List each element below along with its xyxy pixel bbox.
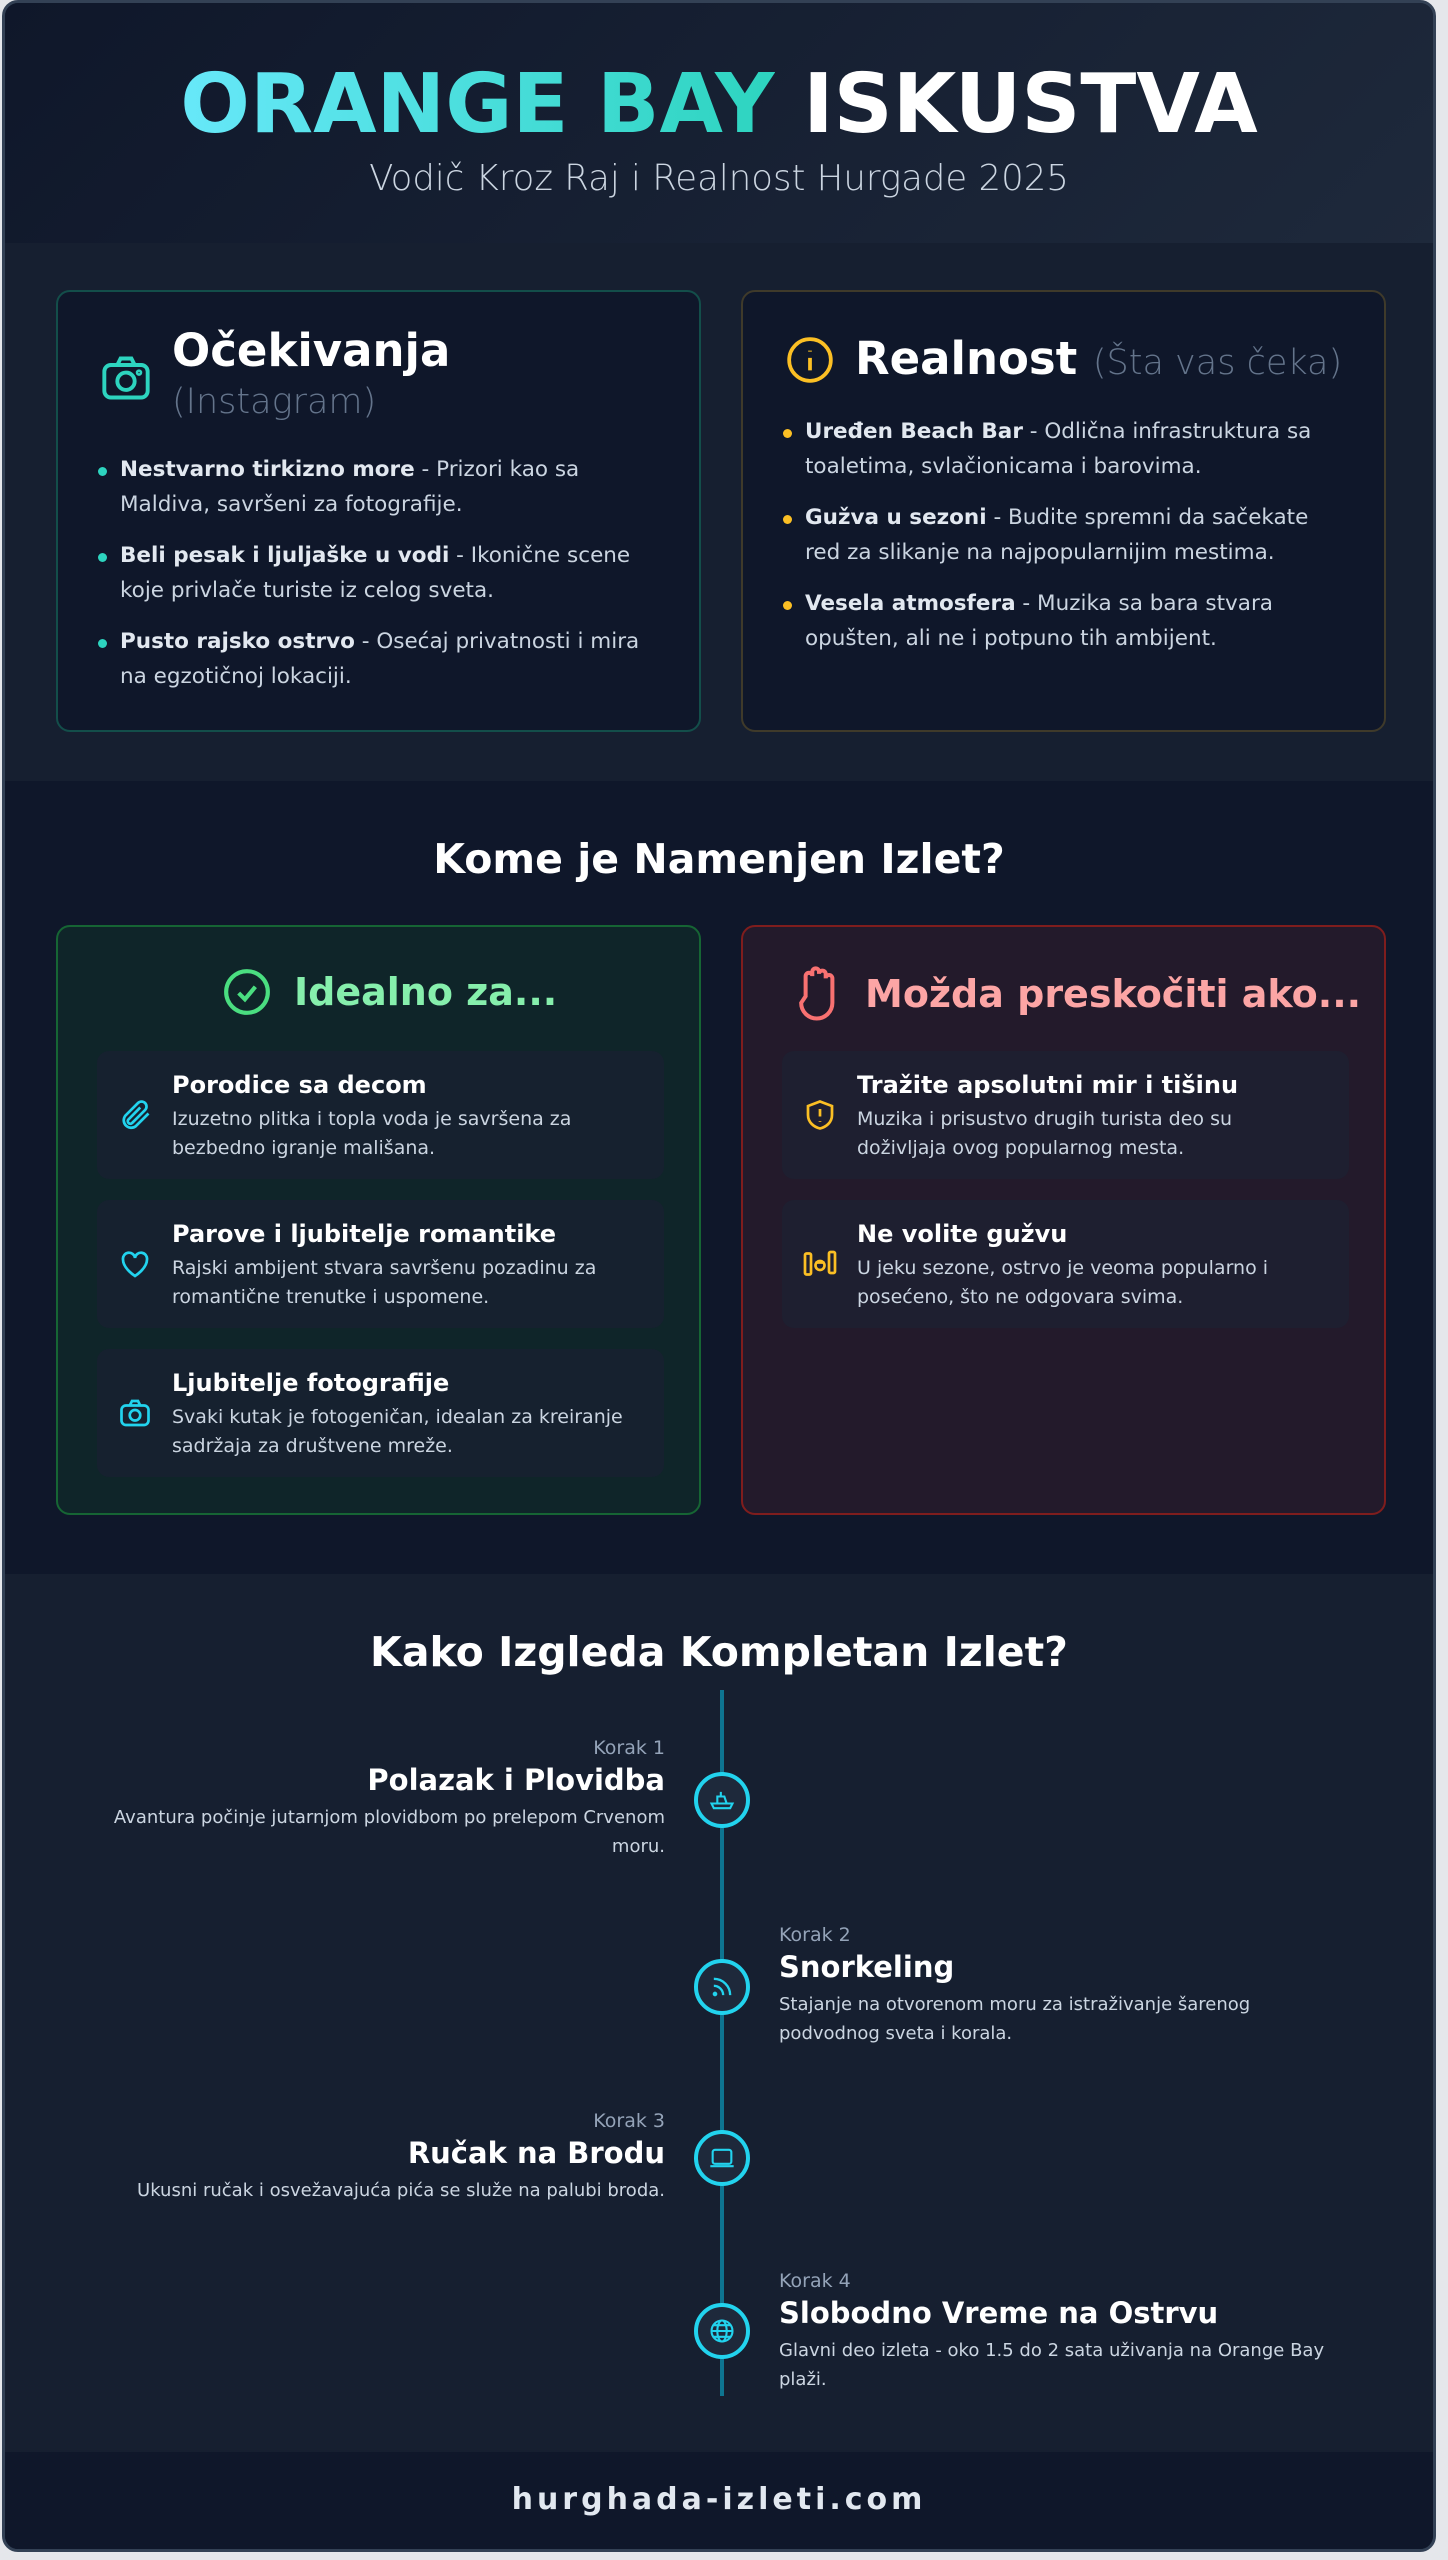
step 4: Korak 4	[779, 2270, 851, 2292]
step 3	[137, 2110, 665, 2201]
icon: camera	[102, 356, 150, 400]
item: families: Porodice sa decom	[172, 1071, 427, 1099]
icon: info	[787, 337, 833, 383]
step 1: Korak 1	[593, 1737, 665, 1759]
item: quiet: Muzika i prisustvo drugih turista deo su doživljaja ovog popularnog mesta.	[857, 1108, 1232, 1159]
panel: expectations: (Instagram)	[172, 382, 376, 422]
icon: globe	[694, 2303, 750, 2359]
item: families: Izuzetno plitka i topla voda je savršena za bezbedno igranje mališana.	[172, 1108, 571, 1159]
heading: Očekivanja	[172, 324, 450, 377]
step 1: Polazak i Plovidba	[367, 1763, 665, 1797]
bullets	[783, 429, 792, 438]
bullets	[98, 467, 107, 476]
step 1: Avantura počinje jutarnjom plovidbom po prelepom Crvenom moru.	[114, 1807, 665, 1857]
item: quiet	[782, 1051, 1349, 1179]
step 3: Ručak na Brodu	[408, 2136, 665, 2170]
icon: lunch	[694, 2130, 750, 2186]
step 2: Korak 2	[779, 1924, 851, 1946]
step 2: Stajanje na otvorenom moru za istraživanje šarenog podvodnog sveta i korala.	[779, 1994, 1250, 2044]
panel: expectations: Beli pesak i ljuljaške u vodi - Ikonične scene koje privlače turiste iz celog sveta.	[120, 543, 630, 603]
header	[5, 3, 1439, 243]
heading: Kako Izgleda Kompletan Izlet?	[370, 1628, 1068, 1676]
item: couples: Parove i ljubitelje romantike	[172, 1220, 556, 1248]
step 4: Slobodno Vreme na Ostrvu	[779, 2296, 1218, 2330]
step 4: Glavni deo izleta - oko 1.5 do 2 sata uživanja na Orange Bay plaži.	[779, 2340, 1324, 2390]
section: who is it for	[5, 781, 1439, 1574]
step 3: Ukusni ručak i osvežavajuća pića se služe na palubi broda.	[137, 2180, 665, 2201]
step 1	[114, 1737, 665, 1857]
item: photographers	[97, 1349, 664, 1477]
icon: waves	[694, 1959, 750, 2015]
panel: reality: Gužva u sezoni - Budite spremni da sačekate red za slikanje na najpopularnijim mestima.	[805, 505, 1308, 565]
icon: boat	[694, 1772, 750, 1828]
step 2: Snorkeling	[779, 1950, 954, 1984]
heading: Kome je Namenjen Izlet?	[433, 835, 1005, 883]
panel: reality: Vesela atmosfera - Muzika sa bara stvara opušten, ali ne i potpuno tih ambijent.	[805, 591, 1273, 651]
item: photographers: Svaki kutak je fotogeničan, idealan za kreiranje sadržaja za društvene mreže.	[172, 1406, 623, 1457]
panel: reality	[741, 290, 1386, 732]
panel: expectations	[56, 290, 701, 732]
step 4	[779, 2270, 1324, 2390]
panel: expectations: Nestvarno tirkizno more - Prizori kao sa Maldiva, savršeni za fotografije.	[120, 457, 579, 517]
item: crowds	[782, 1200, 1349, 1328]
item: families	[97, 1051, 664, 1179]
item: crowds: U jeku sezone, ostrvo je veoma popularno i posećeno, što ne odgovara svima.	[857, 1257, 1268, 1308]
item: crowds: Ne volite gužvu	[857, 1220, 1067, 1248]
step 2	[779, 1924, 1250, 2044]
panel: reality: Uređen Beach Bar - Odlična infrastruktura sa toaletima, svlačionicama i barovima.	[805, 419, 1311, 479]
footer: hurghada-izleti.com	[512, 2482, 926, 2517]
item: photographers: Ljubitelje fotografije	[172, 1369, 449, 1397]
footer	[5, 2452, 1439, 2555]
heading: ideal: Idealno za...	[294, 970, 557, 1014]
panel: ideal for	[56, 925, 701, 1515]
heading: Realnost (Šta vas čeka)	[855, 332, 1342, 385]
title: ORANGE BAY ISKUSTVA	[180, 57, 1258, 152]
subtitle: Vodič Kroz Raj i Realnost Hurgade 2025	[369, 158, 1069, 199]
panel: expectations: Pusto rajsko ostrvo - Osećaj privatnosti i mira na egzotičnoj lokaciji.	[120, 629, 639, 689]
item: quiet: Tražite apsolutni mir i tišinu	[857, 1071, 1238, 1099]
step 3: Korak 3	[593, 2110, 665, 2132]
timeline line	[720, 1690, 724, 2396]
heading: skip: Možda preskočiti ako...	[865, 972, 1361, 1016]
item: couples: Rajski ambijent stvara savršenu pozadinu za romantične trenutke i uspomene.	[172, 1257, 596, 1308]
section: timeline	[5, 1574, 1439, 2452]
panel: maybe skip	[741, 925, 1386, 1515]
item: couples	[97, 1200, 664, 1328]
